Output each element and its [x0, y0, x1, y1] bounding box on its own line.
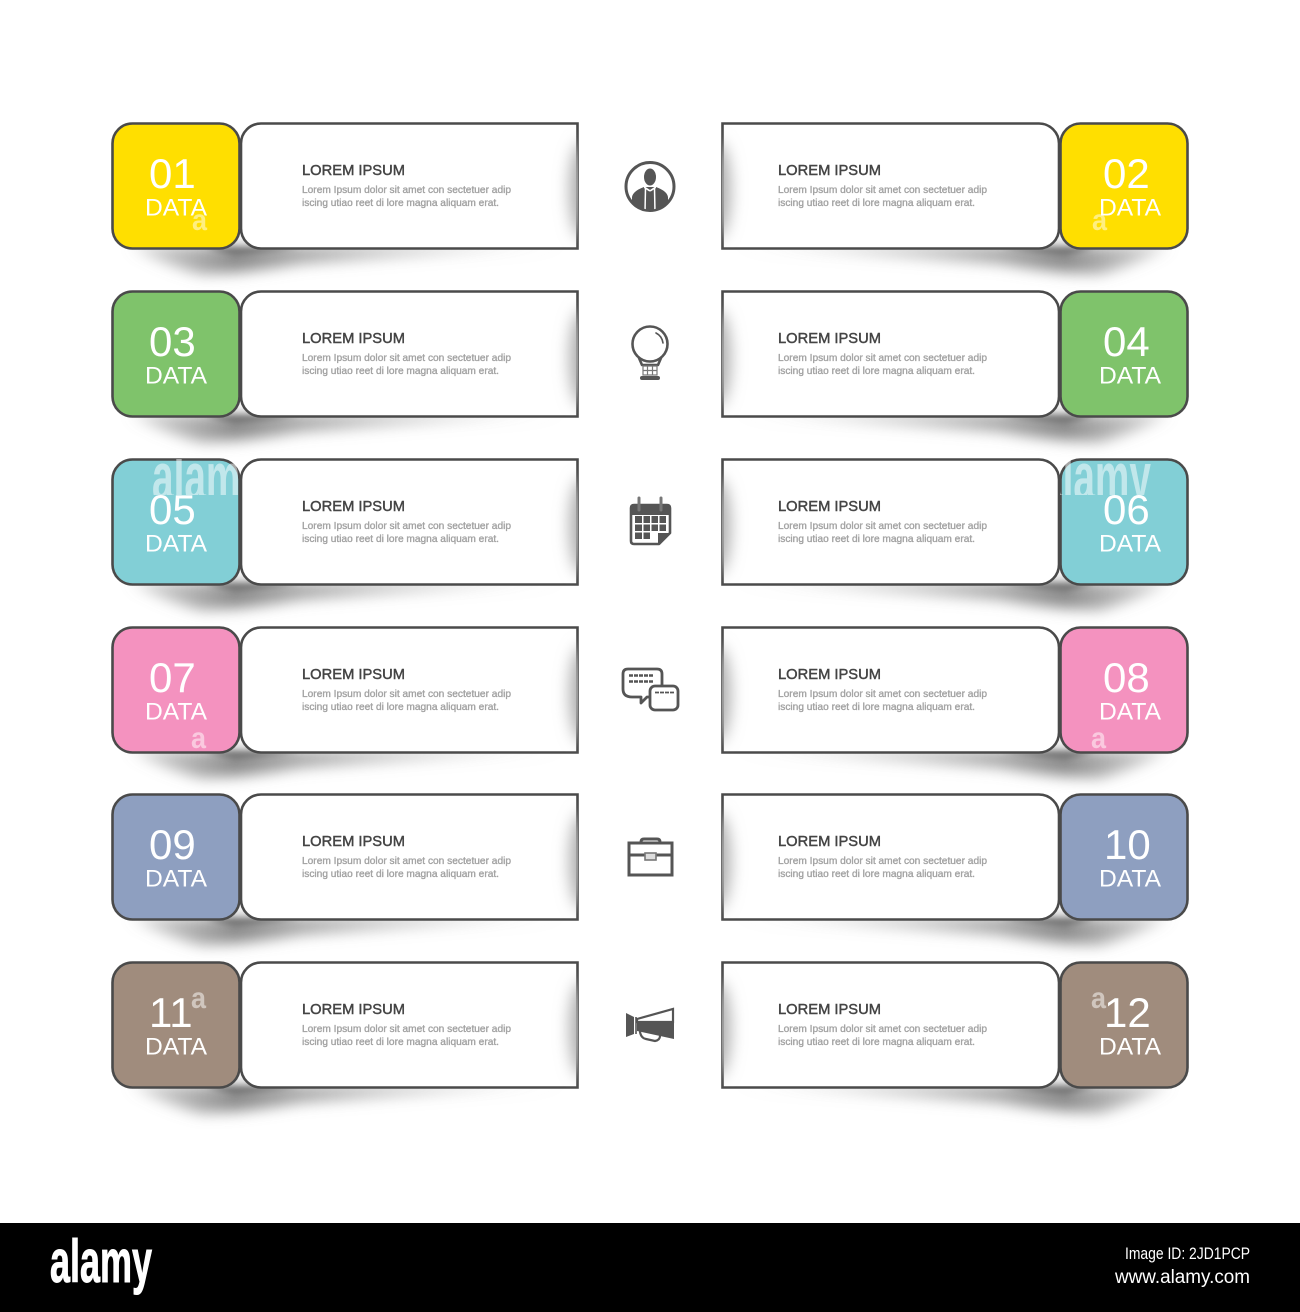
- tile 11: DATA: [145, 1034, 208, 1060]
- icon: businessman: [626, 162, 674, 215]
- tile 12: DATA: [1099, 1034, 1162, 1060]
- card: [241, 794, 596, 920]
- tile 04: 04: [1103, 318, 1150, 365]
- card: Lorem Ipsum dolor sit amet con sectetuer adip: [302, 688, 511, 700]
- tile 07: 07: [149, 654, 196, 701]
- tile 11: a: [191, 982, 206, 1015]
- card: [241, 628, 596, 752]
- tile 06: alamy: [1041, 439, 1151, 515]
- tile 02: DATA: [1099, 194, 1162, 222]
- website: www.alamy.com: [1114, 1267, 1250, 1288]
- card: iscing utiao reet di lore magna aliquam erat.: [778, 1036, 975, 1048]
- tile 05: alamy: [152, 439, 262, 515]
- tile 05: 05: [149, 486, 196, 533]
- card: iscing utiao reet di lore magna aliquam erat.: [302, 197, 499, 209]
- shadow: [730, 582, 1170, 610]
- card: [704, 794, 1059, 920]
- panel: item 09: [112, 794, 596, 945]
- card: iscing utiao reet di lore magna aliquam erat.: [302, 701, 499, 713]
- shadow: [130, 1085, 570, 1113]
- tile 12: a: [1091, 982, 1106, 1015]
- tile 03: 03: [149, 318, 196, 365]
- card: LOREM IPSUM: [302, 330, 405, 347]
- shadow: [730, 1085, 1170, 1113]
- panel: item 02: [704, 124, 1188, 274]
- card: Lorem Ipsum dolor sit amet con sectetuer adip: [778, 520, 987, 532]
- alamy logo: alamy: [50, 1228, 152, 1295]
- tile 11: [112, 962, 240, 1088]
- tile 09: 09: [149, 821, 196, 868]
- icon: briefcase: [629, 839, 672, 875]
- tile 10: [1060, 794, 1188, 920]
- shadow: [130, 917, 570, 945]
- card: iscing utiao reet di lore magna aliquam erat.: [778, 197, 975, 209]
- card: iscing utiao reet di lore magna aliquam erat.: [778, 701, 975, 713]
- tile 06: 06: [1103, 486, 1150, 533]
- card: Lorem Ipsum dolor sit amet con sectetuer adip: [778, 688, 987, 700]
- card: LOREM IPSUM: [778, 162, 881, 179]
- card: [704, 292, 1059, 416]
- icon: calendar: [631, 498, 670, 544]
- card: Lorem Ipsum dolor sit amet con sectetuer adip: [302, 1023, 511, 1035]
- panel: item 06: [704, 439, 1188, 610]
- card: LOREM IPSUM: [778, 1001, 881, 1018]
- tile 10: DATA: [1099, 866, 1162, 892]
- tile 03: DATA: [145, 362, 208, 390]
- card: [704, 628, 1059, 752]
- image id: Image ID: 2JD1PCP: [1125, 1244, 1250, 1263]
- panel: item 11: [112, 962, 596, 1113]
- card: iscing utiao reet di lore magna aliquam erat.: [778, 533, 975, 545]
- shadow: [130, 750, 570, 778]
- footer bar: [0, 1223, 1300, 1312]
- panel: item 05: [112, 439, 596, 610]
- shadow: [730, 246, 1170, 274]
- tile 07: [112, 628, 240, 755]
- card: Lorem Ipsum dolor sit amet con sectetuer adip: [778, 352, 987, 364]
- tile 02: a: [1092, 204, 1107, 237]
- shadow: [130, 582, 570, 610]
- tile 10: 10: [1104, 821, 1151, 868]
- tile 11: 11: [149, 989, 193, 1036]
- tile 12: [1060, 962, 1188, 1088]
- card: [704, 962, 1059, 1088]
- card: Lorem Ipsum dolor sit amet con sectetuer adip: [302, 352, 511, 364]
- card: iscing utiao reet di lore magna aliquam erat.: [302, 868, 499, 880]
- panel: item 04: [704, 292, 1188, 442]
- tile 06: [1060, 458, 1189, 586]
- panel: item 03: [112, 292, 596, 442]
- card: [241, 292, 596, 416]
- tile 01: 01: [149, 150, 196, 197]
- panel: item 07: [112, 628, 596, 778]
- card: [241, 460, 596, 584]
- tile 01: a: [192, 204, 207, 237]
- tile 08: [1060, 628, 1188, 755]
- card: LOREM IPSUM: [302, 1001, 405, 1018]
- tile 08: DATA: [1099, 698, 1162, 726]
- icon: megaphone: [626, 1009, 674, 1041]
- card: Lorem Ipsum dolor sit amet con sectetuer adip: [778, 184, 987, 196]
- card: iscing utiao reet di lore magna aliquam erat.: [302, 1036, 499, 1048]
- card: [704, 460, 1059, 584]
- card: LOREM IPSUM: [302, 666, 405, 683]
- card: LOREM IPSUM: [302, 833, 405, 850]
- card: LOREM IPSUM: [778, 330, 881, 347]
- tile 08: 08: [1103, 654, 1150, 701]
- card: LOREM IPSUM: [302, 498, 405, 515]
- panel: item 01: [112, 124, 596, 274]
- shadow: [730, 750, 1170, 778]
- card: [241, 124, 596, 248]
- card: Lorem Ipsum dolor sit amet con sectetuer adip: [302, 855, 511, 867]
- tile 09: [112, 794, 240, 920]
- panel: item 08: [704, 628, 1188, 778]
- card: [241, 962, 596, 1088]
- tile 03: [112, 292, 240, 416]
- card: iscing utiao reet di lore magna aliquam erat.: [778, 868, 975, 880]
- shadow: [130, 246, 570, 274]
- panel: item 10: [704, 794, 1188, 945]
- tile 04: [1060, 292, 1188, 416]
- tile 08: a: [1091, 722, 1106, 755]
- tile 06: DATA: [1099, 530, 1162, 558]
- card: iscing utiao reet di lore magna aliquam erat.: [778, 365, 975, 377]
- shadow: [730, 917, 1170, 945]
- tile 09: DATA: [145, 866, 208, 892]
- card: Lorem Ipsum dolor sit amet con sectetuer adip: [302, 184, 511, 196]
- tile 12: 12: [1104, 989, 1151, 1036]
- panel: item 12: [704, 962, 1188, 1113]
- card: LOREM IPSUM: [778, 498, 881, 515]
- shadow: [730, 414, 1170, 442]
- card: LOREM IPSUM: [302, 162, 405, 179]
- icon: chat bubbles: [623, 669, 678, 710]
- icon: light bulb: [632, 326, 668, 378]
- card: Lorem Ipsum dolor sit amet con sectetuer adip: [778, 855, 987, 867]
- tile 02: [1060, 124, 1188, 248]
- shadow: [130, 414, 570, 442]
- tile 02: 02: [1103, 150, 1150, 197]
- tile 01: [112, 124, 240, 248]
- card: iscing utiao reet di lore magna aliquam erat.: [302, 533, 499, 545]
- tile 07: a: [191, 722, 206, 755]
- card: iscing utiao reet di lore magna aliquam erat.: [302, 365, 499, 377]
- tile 05: DATA: [145, 530, 208, 558]
- tile 05: [111, 458, 240, 586]
- card: [704, 124, 1059, 248]
- tile 01: DATA: [145, 194, 208, 222]
- tile 04: DATA: [1099, 362, 1162, 390]
- card: Lorem Ipsum dolor sit amet con sectetuer adip: [302, 520, 511, 532]
- card: Lorem Ipsum dolor sit amet con sectetuer adip: [778, 1023, 987, 1035]
- card: LOREM IPSUM: [778, 833, 881, 850]
- card: LOREM IPSUM: [778, 666, 881, 683]
- tile 07: DATA: [145, 698, 208, 726]
